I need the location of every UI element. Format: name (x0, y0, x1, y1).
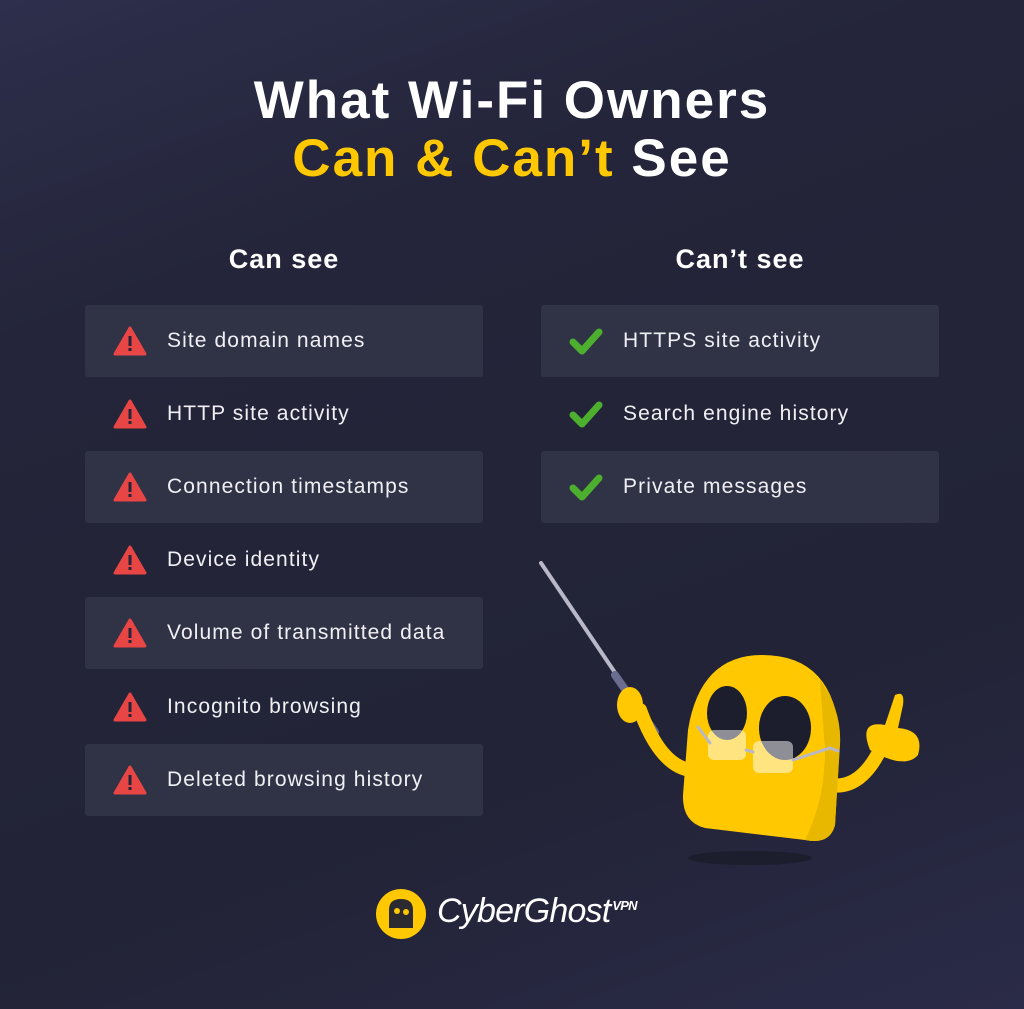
row: search engine history: Search engine history (623, 402, 849, 425)
title (254, 71, 770, 188)
row: connection timestamps: Connection timestamps (167, 475, 410, 498)
row: deleted browsing history (85, 744, 483, 816)
row: https site activity: HTTPS site activity (623, 329, 821, 352)
heading: can't see: Can’t see (675, 244, 805, 274)
row: incognito browsing: Incognito browsing (167, 695, 362, 718)
row: https site activity (541, 305, 939, 377)
row: volume of transmitted data (85, 597, 483, 669)
logo: CyberGhost VPN (376, 889, 638, 939)
row: site domain names (85, 305, 483, 377)
row: volume of transmitted data: Volume of transmitted data (167, 621, 445, 644)
row: device identity: Device identity (167, 548, 320, 571)
title: Can & Can’t See (292, 129, 732, 188)
panel: can't see list (541, 305, 939, 523)
logo: CyberGhost VPN: CyberGhostVPN (437, 892, 637, 930)
title: What Wi-Fi Owners (254, 71, 770, 130)
row: deleted browsing history: Deleted browsing history (167, 768, 423, 791)
row: private messages (541, 451, 939, 523)
row: incognito browsing (114, 692, 362, 722)
icon: ghost logo (376, 889, 426, 939)
row: http site activity: HTTP site activity (167, 402, 350, 425)
row: private messages: Private messages (623, 475, 808, 498)
heading: can see: Can see (229, 244, 339, 274)
panel: can see list (85, 305, 483, 816)
row: connection timestamps (85, 451, 483, 523)
row: http site activity (114, 399, 350, 428)
row: device identity (114, 545, 320, 574)
row: site domain names: Site domain names (167, 329, 365, 352)
